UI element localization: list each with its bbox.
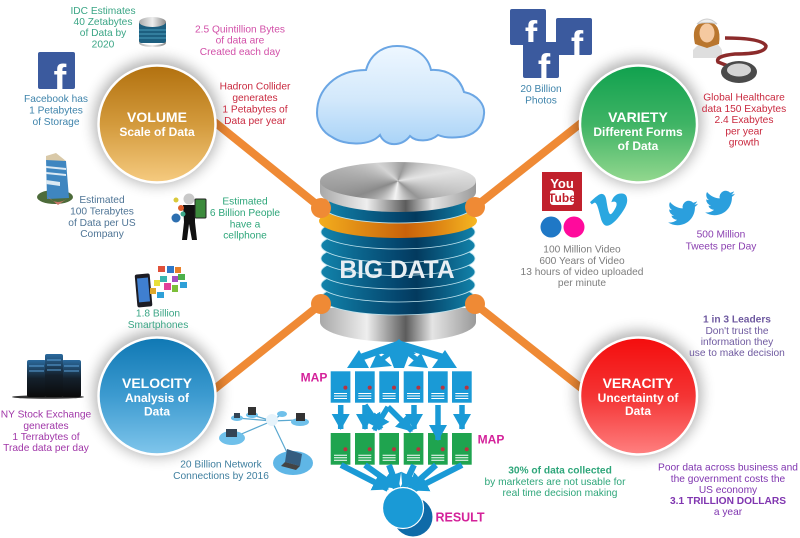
panel: velocity: Analysis of <box>125 391 190 405</box>
top metal disc face <box>320 162 476 200</box>
text: data collected: real time decision making <box>503 488 618 499</box>
text: quintillion bytes: 2.5 Quintillion Bytes <box>195 24 285 36</box>
panel: volume: VOLUME <box>127 109 187 125</box>
panel: veracity: Data <box>625 404 651 418</box>
panel: variety: VARIETY <box>608 109 668 125</box>
icon: facebook trio <box>510 9 592 88</box>
connector dot: top left <box>311 198 331 218</box>
text: hadron collider: Hadron Collider <box>220 82 291 92</box>
result circles <box>382 488 432 536</box>
label: map bottom: MAP <box>478 432 504 446</box>
connector: volume <box>212 120 321 208</box>
connector dot: top right <box>465 197 485 217</box>
panel: velocity: VELOCITY <box>122 375 193 391</box>
text: global healthcare: growth <box>729 138 759 148</box>
text: NY stock exchange: generates <box>23 421 69 432</box>
text: facebook storage: Facebook has <box>24 94 88 105</box>
text: NY stock exchange: NY Stock Exchange <box>1 410 92 420</box>
text: hadron collider: 1 Petabytes of <box>222 104 288 116</box>
green server row <box>331 433 472 465</box>
icon: vimeo <box>590 193 627 226</box>
text: NY stock exchange: Trade data per day <box>3 443 90 454</box>
text: hadron collider: generates <box>232 93 278 104</box>
connector: veracity <box>475 304 585 391</box>
icon: flickr <box>540 216 584 238</box>
text: cellphones: Estimated <box>222 196 268 208</box>
text: leaders: use to make decision <box>689 348 785 359</box>
text: hadron collider: Data per year <box>224 116 286 127</box>
arrows: up to cylinder <box>347 339 457 368</box>
text: quintillion bytes: of data are <box>216 36 265 46</box>
panel: variety: of Data <box>618 139 659 153</box>
icon: twitter birds <box>668 191 735 225</box>
icon: youtube: You <box>550 176 574 191</box>
text: leaders: information they <box>701 337 774 348</box>
text: NY stock exchange: 1 Terrabytes of <box>12 432 80 443</box>
text: per company: 100 Terabytes <box>70 206 134 218</box>
text: video stats: 600 Years of Video <box>539 256 625 267</box>
text: IDC estimate: of Data by <box>80 28 127 39</box>
text: poor data cost: Poor data across business and <box>658 462 798 474</box>
text: data collected: 30% of data collected <box>508 466 612 476</box>
connector: velocity <box>212 304 321 391</box>
text: cellphones: 6 Billion People <box>210 208 280 219</box>
top metal disc side <box>320 181 476 212</box>
text: smartphones: 1.8 Billion <box>136 308 180 320</box>
panel: volume: Scale of Data <box>119 125 195 139</box>
cloud <box>317 46 484 144</box>
text: smartphones: Smartphones <box>128 320 188 331</box>
text: video stats: 100 Million Video <box>543 244 621 256</box>
panel: velocity: Data <box>144 404 170 418</box>
text: poor data cost: US economy <box>699 485 758 496</box>
arrows: green to result <box>341 465 462 490</box>
label: map top: MAP <box>301 370 327 384</box>
panel: veracity: Uncertainty of <box>598 391 679 405</box>
title: big data: BIG DATA <box>339 257 455 284</box>
panel: variety <box>576 59 702 185</box>
text: tweets: 500 Million <box>697 230 745 240</box>
text: video stats: 13 hours of video uploaded <box>521 267 644 278</box>
text: per company: Company <box>80 229 125 240</box>
icon: facebook <box>38 52 75 100</box>
connector: variety <box>475 120 585 207</box>
text: per company: Estimated <box>79 195 125 206</box>
icon: youtube: Tube <box>548 191 576 205</box>
text: data collected: by marketers are not usable for <box>484 477 626 488</box>
top blue layer <box>324 191 472 223</box>
icon: person with phone <box>172 194 206 240</box>
text: network connections: 20 Billion Network <box>180 460 263 470</box>
text: poor data cost: 3.1 TRILLION DOLLARS <box>670 496 786 507</box>
bottom metal disc <box>320 308 476 342</box>
orange layer <box>319 204 477 238</box>
text: IDC estimate: IDC Estimates <box>70 6 136 17</box>
icon: nurse and stethoscope <box>693 19 766 83</box>
text: facebook storage: of Storage <box>32 117 80 128</box>
text: video stats: per minute <box>558 278 606 289</box>
panel: veracity: VERACITY <box>603 375 674 391</box>
text: IDC estimate: 40 Zetabytes <box>74 17 132 28</box>
icon: facebook trio: f <box>571 24 584 65</box>
text: per company: of Data per US <box>68 218 136 229</box>
text: facebook storage: 1 Petabytes <box>29 106 83 116</box>
connector dot: bottom right <box>465 294 485 314</box>
text: tweets: Tweets per Day <box>686 242 757 252</box>
text: photos: Photos <box>525 96 557 106</box>
panel: veracity <box>576 331 702 457</box>
icon: smartphone and apps <box>135 266 187 308</box>
icon: facebook trio: f <box>525 14 538 55</box>
text: cellphones: cellphone <box>223 230 267 242</box>
arrows: blue to green <box>341 405 462 440</box>
panel: velocity <box>94 331 220 457</box>
icon: facebook trio: f <box>538 47 551 88</box>
text: global healthcare: Global Healthcare <box>703 92 785 104</box>
text: poor data cost: the government costs the <box>671 474 786 485</box>
text: cellphones: have a <box>230 220 261 230</box>
connector dot: bottom left <box>311 294 331 314</box>
label: result: RESULT <box>435 510 485 524</box>
text: leaders: Don't trust the <box>705 326 769 337</box>
text: global healthcare: 2.4 Exabytes <box>715 115 773 126</box>
icon: network <box>219 407 313 475</box>
blue server row <box>331 371 472 403</box>
text: leaders: 1 in 3 Leaders <box>703 314 771 326</box>
panel: variety: Different Forms <box>593 125 683 139</box>
panel: volume <box>94 59 220 185</box>
diagram: map reduce <box>301 339 504 536</box>
icon: server towers <box>12 354 84 399</box>
stacked blue layers <box>321 215 475 315</box>
icon: database <box>139 17 166 47</box>
text: poor data cost: a year <box>714 507 743 518</box>
icon: facebook: f <box>54 58 67 100</box>
text: IDC estimate: 2020 <box>92 40 115 50</box>
text: photos: 20 Billion <box>520 84 562 95</box>
text: global healthcare: data 150 Exabytes <box>702 104 786 115</box>
text: global healthcare: per year <box>725 126 763 138</box>
text: quintillion bytes: Created each day <box>200 47 281 58</box>
icon: office building <box>37 153 73 205</box>
icon: youtube <box>542 172 582 211</box>
text: network connections: Connections by 2016 <box>173 471 269 482</box>
database cylinder <box>319 162 477 342</box>
